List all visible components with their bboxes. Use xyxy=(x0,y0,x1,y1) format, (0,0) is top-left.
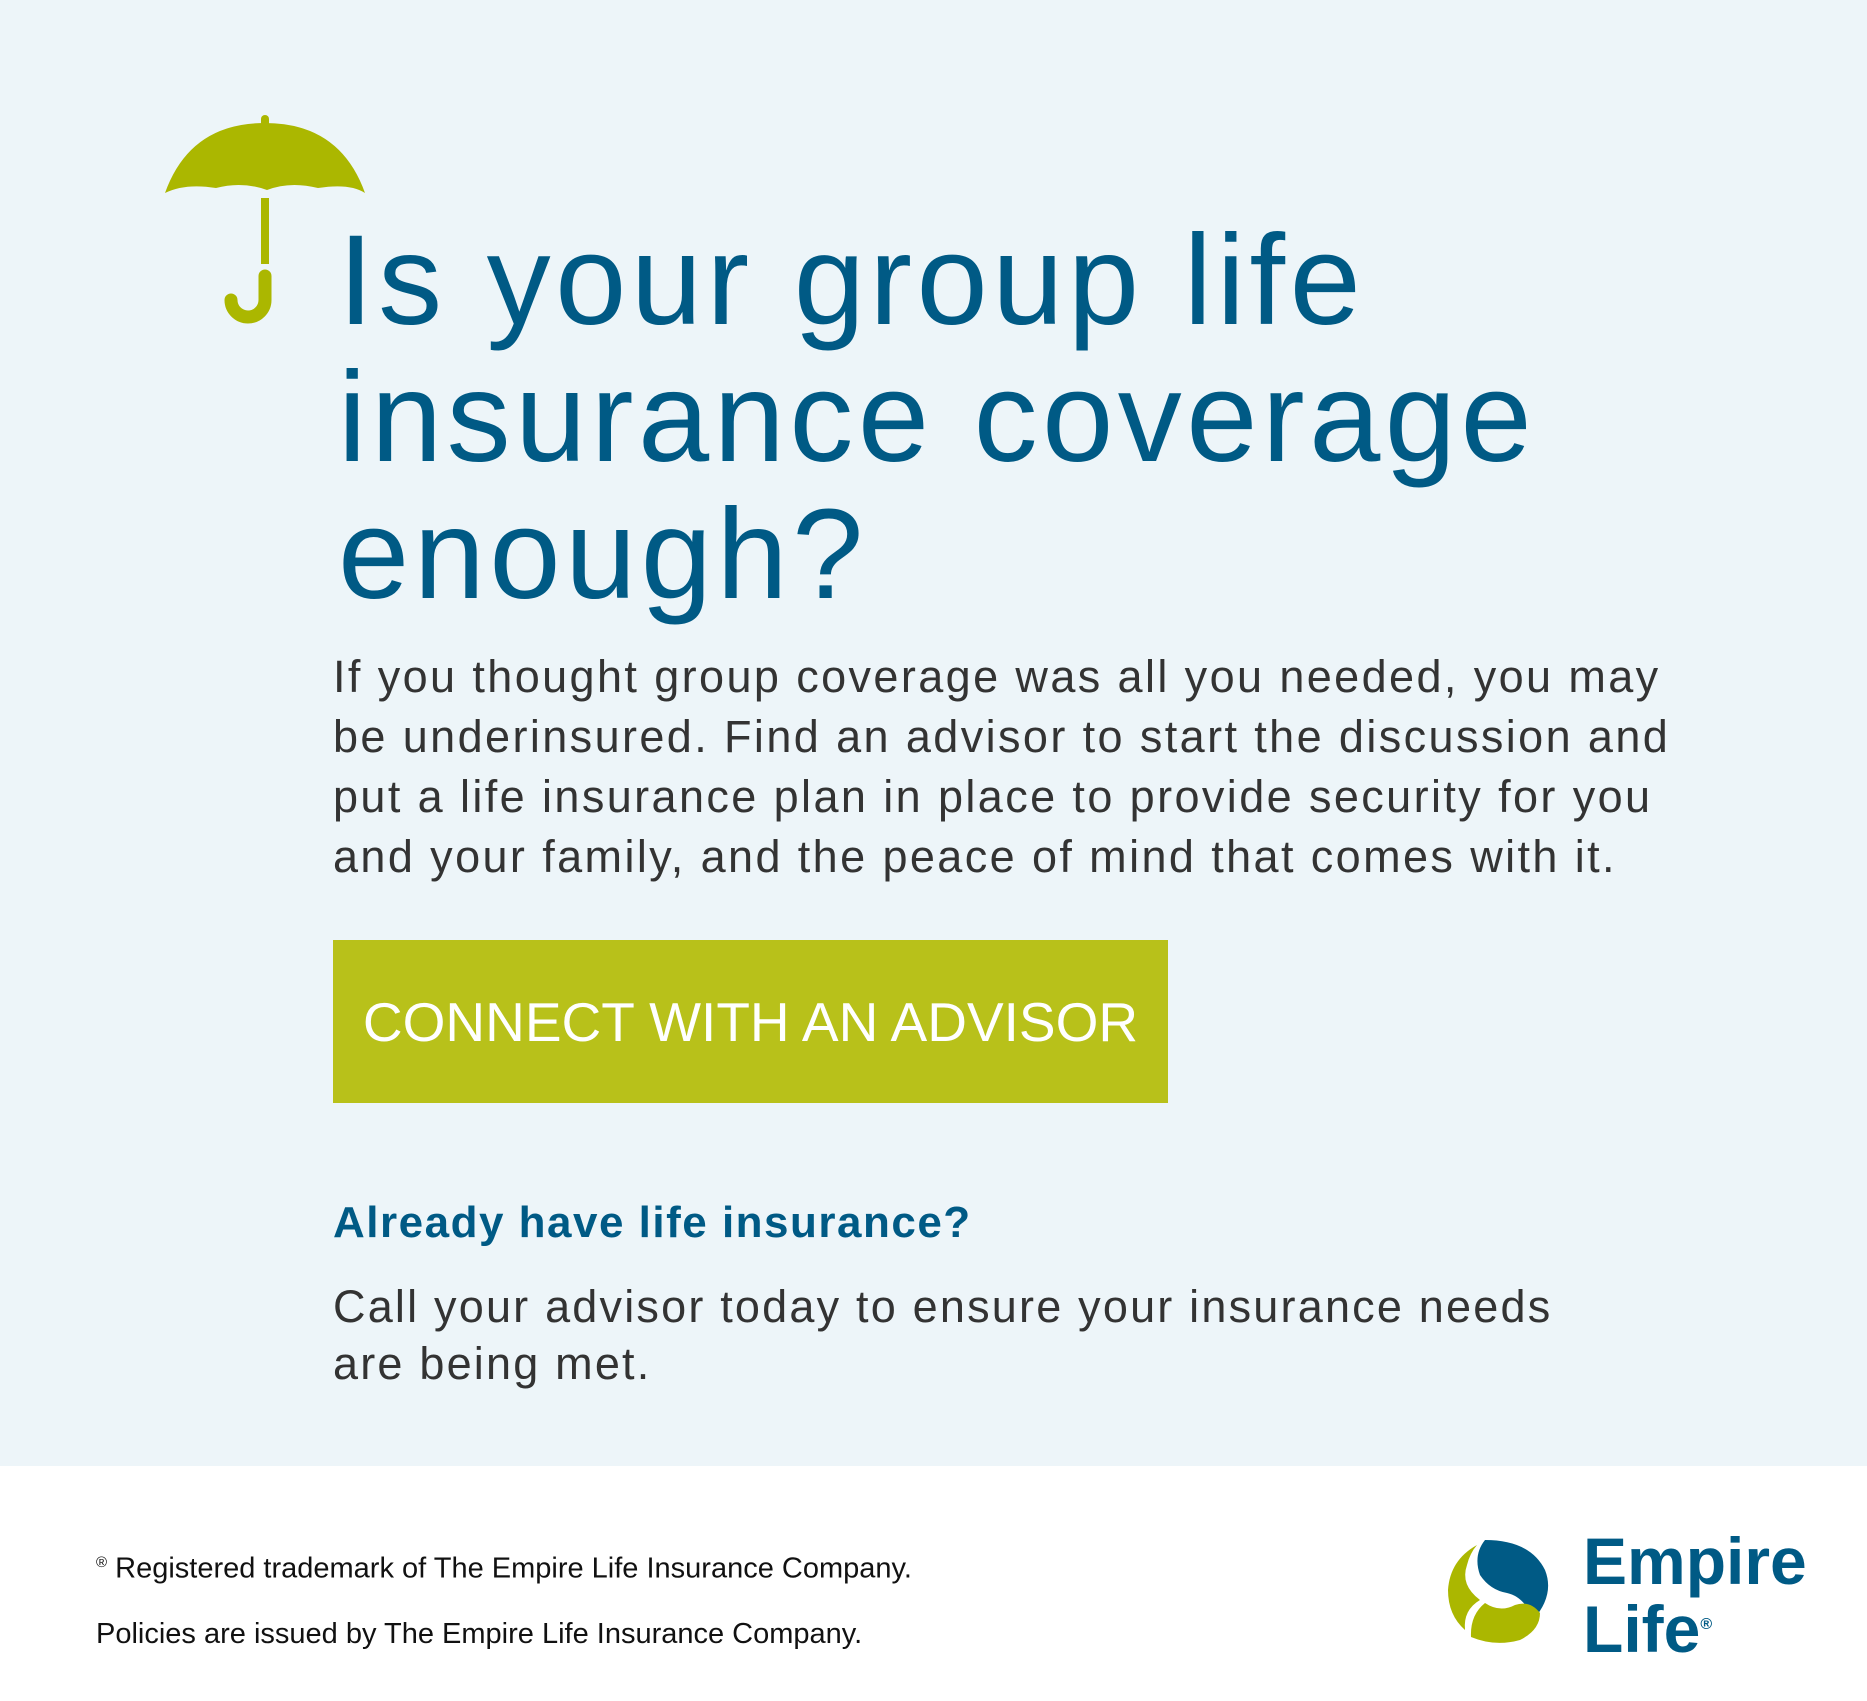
text: call advisor: Call your advisor today to ensure your insurance needs xyxy=(333,1281,1552,1332)
logo text xyxy=(1583,1524,1807,1666)
text: call advisor: are being met. xyxy=(333,1338,651,1389)
body text: be underinsured. Find an advisor to start the discussion and xyxy=(333,711,1670,762)
logo text: Empire xyxy=(1583,1524,1807,1598)
footer text xyxy=(96,1553,912,1650)
footer text: ® Registered trademark of The Empire Life Insurance Company. xyxy=(96,1553,912,1585)
body text: and your family, and the peace of mind that comes with it. xyxy=(333,831,1617,882)
subheading: Already have life insurance? xyxy=(333,1198,972,1247)
icon: umbrella xyxy=(165,115,365,324)
button: connect with an advisor xyxy=(333,940,1168,1103)
body text xyxy=(333,651,1670,882)
logo text: Life® xyxy=(1583,1592,1712,1666)
button: connect with an advisor: CONNECT WITH AN ADVISOR xyxy=(363,990,1138,1052)
body text: put a life insurance plan in place to provide security for you xyxy=(333,771,1652,822)
icon: logo symbol xyxy=(1448,1540,1548,1643)
title: enough? xyxy=(338,483,868,626)
title xyxy=(338,209,1536,626)
body text: If you thought group coverage was all you needed, you may xyxy=(333,651,1661,702)
text: call advisor xyxy=(333,1281,1552,1389)
title: Is your group life xyxy=(338,209,1365,352)
title: insurance coverage xyxy=(338,346,1536,489)
footer text: Policies are issued by The Empire Life Insurance Company. xyxy=(96,1618,862,1650)
logo xyxy=(1448,1524,1807,1666)
